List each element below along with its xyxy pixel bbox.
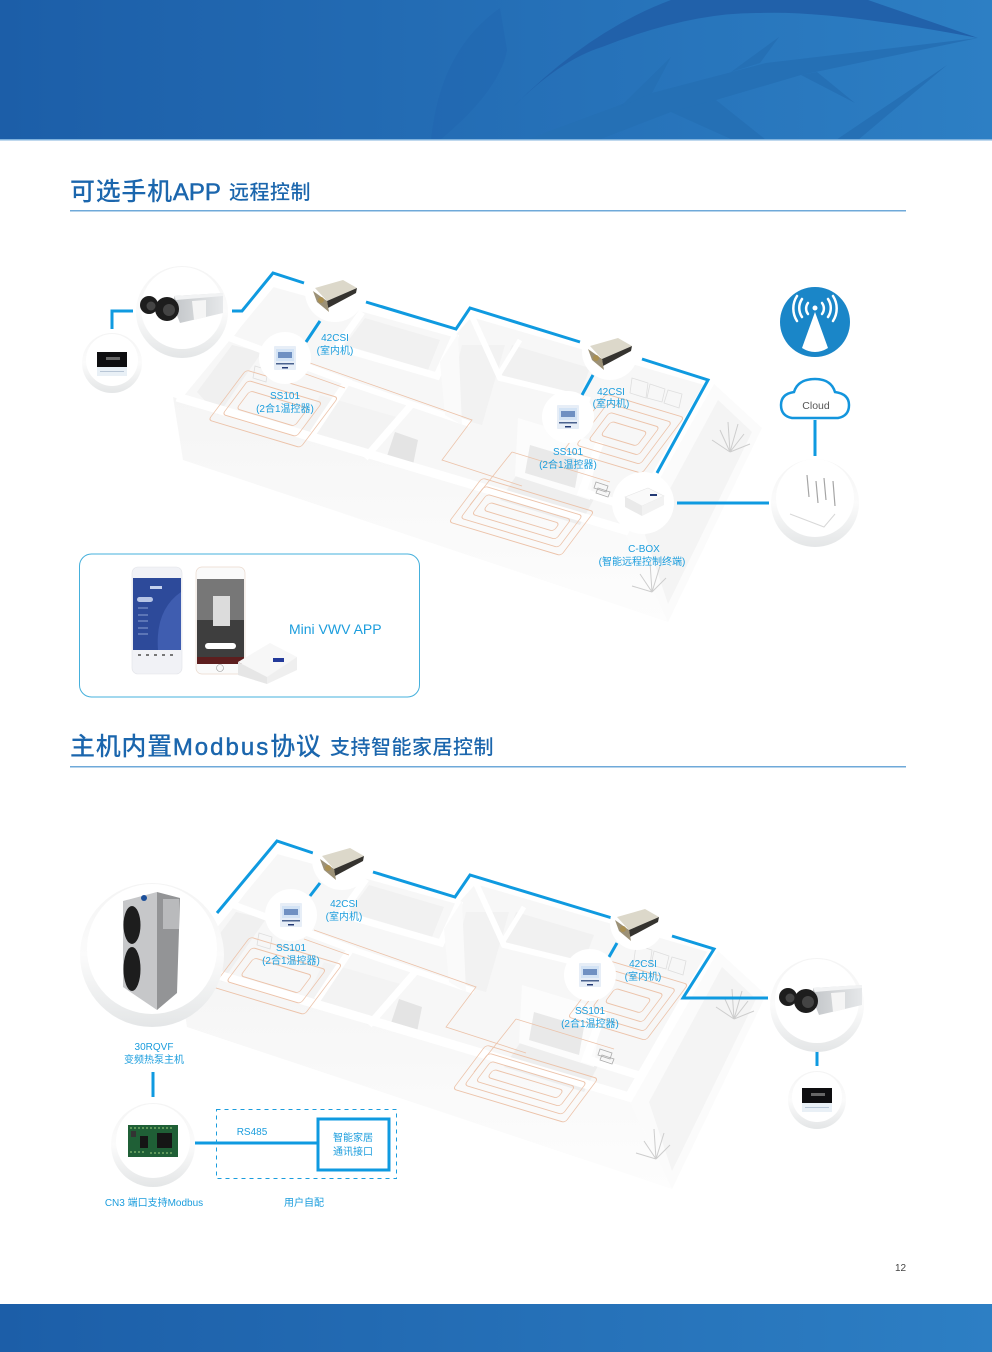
header banner [0, 0, 992, 140]
icon: thermostat left [259, 332, 311, 384]
user-configured dashed frame [216, 1110, 396, 1178]
connection lines [112, 273, 815, 503]
label: user configured: 用户自配 [284, 1196, 324, 1209]
icon: control board [111, 1103, 195, 1187]
icon: router [771, 459, 859, 547]
heading: modbus protocol [70, 733, 906, 768]
icon: thermostat left [265, 889, 317, 941]
panel label: Mini VWV APP [289, 621, 382, 637]
icon: wireless signal [780, 287, 850, 357]
label: heat pump: 变频热泵主机 [124, 1053, 184, 1066]
icon: ventilation unit [136, 266, 228, 358]
icon: indoor unit right [610, 896, 664, 950]
label: indoor unit left: 42CSI [321, 333, 349, 344]
icon: C-BOX [612, 472, 674, 534]
icon: cloud: Cloud [802, 400, 830, 412]
heading: app remote control [70, 178, 906, 212]
label: thermostat right: (2合1温控器) [539, 458, 597, 471]
icon: thermostat right [542, 391, 594, 443]
connection lines [153, 841, 817, 1143]
label: indoor unit right: 42CSI [629, 959, 657, 970]
label: RS485: RS485 [237, 1127, 268, 1138]
icon: thermostat right [564, 949, 616, 1001]
icon: cloud [781, 379, 849, 418]
label: thermostat left: (2合1温控器) [262, 954, 320, 967]
device: C-BOX [238, 643, 297, 684]
label: thermostat left: SS101 [276, 943, 306, 954]
label: C-BOX: C-BOX [628, 544, 660, 555]
heading: app remote control: 可选手机APP [70, 178, 221, 206]
page number: 12 [895, 1263, 907, 1274]
heading: modbus protocol: 主机内置Modbus协议 [70, 733, 322, 761]
phone: android [132, 567, 182, 674]
smart home interface box: 智能家居 [333, 1133, 373, 1144]
apartment floor plan [173, 278, 762, 622]
diagram: apartment with smart home control [80, 830, 864, 1209]
label: indoor unit left: (室内机) [326, 910, 362, 923]
icon: indoor unit right [582, 324, 638, 380]
heading: app remote control: 远程控制 [229, 181, 311, 204]
icon: heat pump [80, 883, 224, 1027]
label: thermostat left: (2合1温控器) [256, 402, 314, 415]
label: indoor unit left: (室内机) [317, 344, 353, 357]
banner edge [0, 139, 992, 140]
smart home interface box [318, 1119, 389, 1170]
label: indoor unit right: (室内机) [625, 970, 661, 983]
footer band [0, 1304, 992, 1352]
label: indoor unit right: (室内机) [593, 397, 629, 410]
diagram: apartment with remote control [82, 262, 859, 622]
icon: ventilation unit [770, 958, 864, 1052]
icon: control panel [788, 1071, 846, 1129]
label: thermostat right: SS101 [553, 447, 583, 458]
label: indoor unit left: 42CSI [330, 899, 358, 910]
label: thermostat right: (2合1温控器) [561, 1017, 619, 1030]
phone: iphone [196, 567, 245, 674]
smart home interface box: 通讯接口 [333, 1145, 373, 1158]
heading: modbus protocol: 支持智能家居控制 [330, 736, 494, 759]
panel: Mini VWV APP [80, 554, 420, 697]
apartment floor plan [177, 845, 766, 1189]
icon: control panel [82, 333, 142, 393]
label: C-BOX: (智能远程控制终端) [599, 555, 685, 568]
label: control board: CN3 端口支持Modbus [105, 1196, 203, 1209]
icon: indoor unit left [312, 830, 372, 890]
leaf pattern [431, 0, 978, 140]
label: thermostat right: SS101 [575, 1006, 605, 1017]
label: thermostat left: SS101 [270, 391, 300, 402]
icon: indoor unit left [305, 262, 365, 322]
label: heat pump: 30RQVF [135, 1042, 173, 1053]
label: indoor unit right: 42CSI [597, 387, 625, 398]
